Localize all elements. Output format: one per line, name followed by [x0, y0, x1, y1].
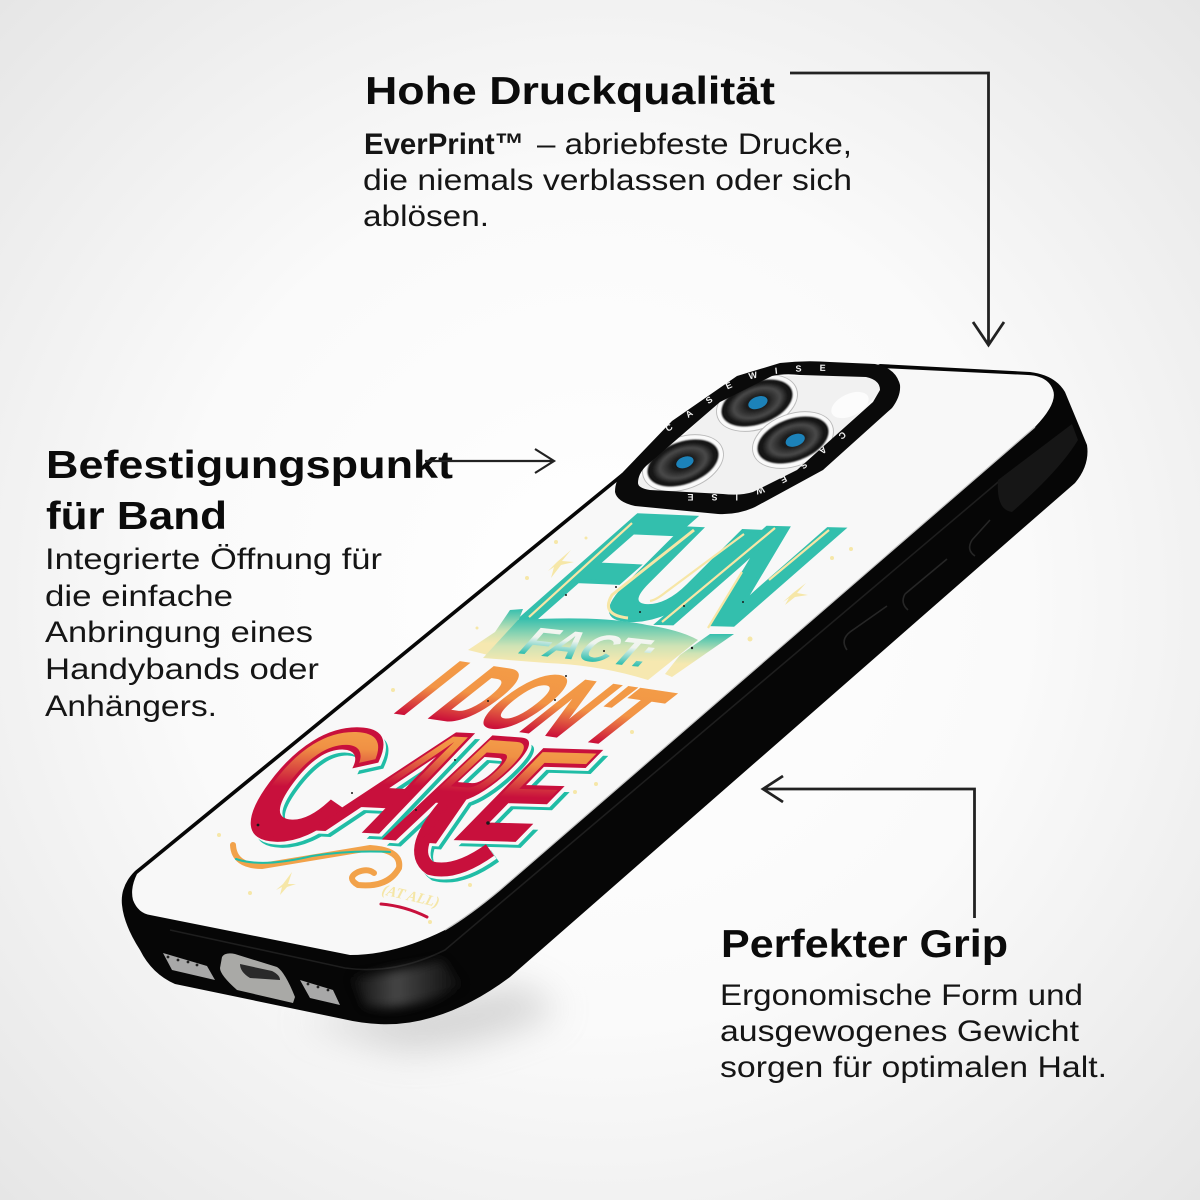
- print: CARE lettering: R: [347, 706, 577, 872]
- print: FUN lettering: [475, 483, 886, 655]
- camera glass area: [636, 376, 882, 495]
- arrow: grip: [763, 776, 974, 918]
- arrow: print quality: [790, 73, 1004, 345]
- heading: Befestigungspunkt: [46, 444, 453, 487]
- lens top: [709, 364, 805, 442]
- print: FUN cream accents: [529, 523, 829, 628]
- print: FUN lettering: U: [558, 499, 797, 649]
- body text: Anhängers.: [45, 690, 217, 723]
- side strap slot: [998, 424, 1078, 512]
- body text: die einfache: [45, 580, 233, 613]
- phone with case: [122, 361, 1088, 1024]
- print: CARE lettering: [201, 696, 633, 873]
- body text: Ergonomische Form und: [720, 979, 1083, 1012]
- flash: [827, 387, 873, 423]
- case body: [122, 364, 1088, 1024]
- body text: Handybands oder: [45, 653, 319, 686]
- side edge details: [170, 442, 1072, 970]
- lens left: [635, 424, 731, 502]
- heading: Perfekter Grip: [721, 923, 1008, 966]
- print: swash: [233, 845, 399, 885]
- heading: für Band: [46, 495, 227, 538]
- speaker left: [163, 953, 215, 980]
- heading: Hohe Druckqualität: [365, 70, 775, 113]
- callout: Befestigungspunkt: [45, 444, 453, 723]
- print: black specks: [257, 586, 744, 826]
- camera island: [615, 361, 900, 514]
- print: FACT banner: [468, 609, 734, 680]
- print: at all: (AT ALL): [380, 882, 441, 911]
- camera ring: [615, 361, 900, 514]
- body text: [363, 128, 852, 233]
- print: FUN lettering: N: [614, 498, 886, 655]
- print: CARE lettering: E: [423, 723, 633, 868]
- body text: EverPrint™: [364, 128, 524, 161]
- callout: Hohe Druckqualität: [363, 70, 852, 233]
- port opening: [240, 964, 280, 980]
- casewise ring text: [666, 364, 846, 500]
- glossy bottom corner: [352, 960, 462, 1008]
- body text: ablösen.: [363, 200, 489, 233]
- body text: die niemals verblassen oder sich: [363, 164, 852, 197]
- body text: Anbringung eines: [45, 616, 313, 649]
- printed back panel: [132, 368, 1054, 955]
- heading: [46, 444, 453, 538]
- body text: Integrierte Öffnung für: [45, 543, 382, 576]
- print: CARE lettering: C: [201, 696, 427, 873]
- print: I DON'T lettering: I DON'T: [372, 646, 697, 760]
- speaker right: [300, 980, 340, 1005]
- casewise ring text: CASEWISE: [688, 432, 846, 500]
- body text: [45, 543, 382, 723]
- print: stars and specks: [217, 536, 853, 924]
- callout: Perfekter Grip: [720, 923, 1107, 1084]
- print: CARE lettering: A: [273, 704, 535, 862]
- print: FACT text: FACT:: [507, 620, 672, 676]
- print: FUN lettering: F: [475, 483, 736, 654]
- lens right: [745, 401, 841, 479]
- body text: ausgewogenes Gewicht: [720, 1015, 1080, 1048]
- body text: [720, 979, 1107, 1084]
- charging port: [220, 953, 295, 1003]
- body text: sorgen für optimalen Halt.: [720, 1051, 1107, 1084]
- arrow: strap attachment: [425, 449, 554, 473]
- body text: – abriebfeste Drucke,: [537, 128, 852, 161]
- phone shadow: [300, 985, 560, 1050]
- casewise ring text: CASEWISE: [666, 364, 826, 431]
